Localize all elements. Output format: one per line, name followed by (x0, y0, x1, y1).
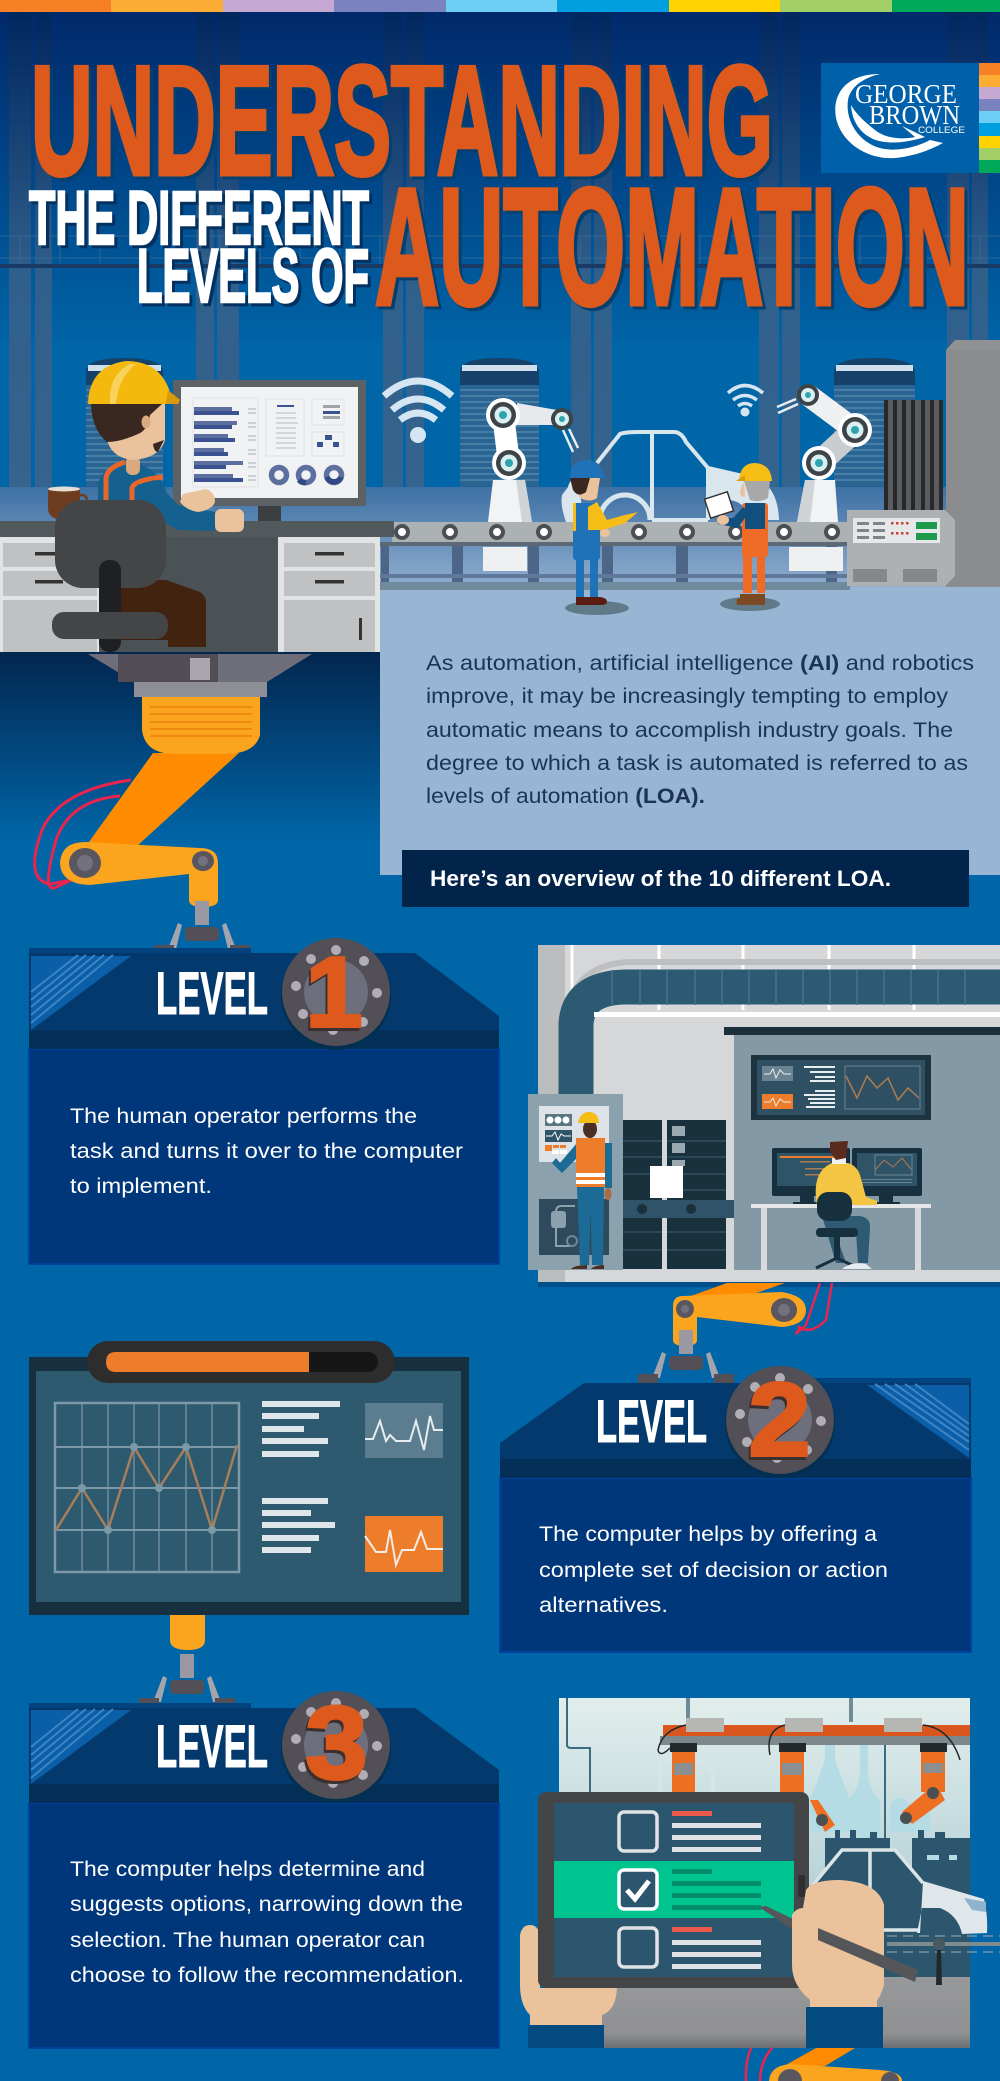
level 3 header: 3 (306, 1686, 367, 1800)
left deep-blue gradient under desk (0, 652, 380, 842)
overhead gantry and robots (658, 1718, 970, 1832)
checklist row 3 (619, 1927, 761, 1969)
level 1 description: task and turns it over to the computer (70, 1140, 463, 1163)
server racks (86, 358, 915, 487)
level 3 description: choose to follow the recommendation. (70, 1964, 464, 1987)
level 2 description: The computer helps by offering a (539, 1523, 877, 1546)
header factory backdrop (0, 12, 1000, 488)
intro text panel (380, 652, 1000, 875)
car body frame (562, 432, 779, 522)
title (29, 34, 969, 340)
right hand with stylus (759, 1880, 918, 2048)
intro text panel: levels of automation (LOA). (426, 785, 705, 808)
robot arm right (777, 384, 872, 522)
robot arm 2 (638, 1283, 832, 1383)
level 1 header (29, 937, 499, 1050)
level 2 header: 2 (749, 1362, 810, 1477)
overview callout bar: Here’s an overview of the 10 different LOA. (430, 866, 891, 891)
title: THE DIFFERENT (29, 176, 369, 261)
operator (88, 361, 244, 532)
robot arm 1 (35, 654, 312, 954)
overview callout bar (402, 850, 969, 907)
level 3 description: The computer helps determine and (70, 1858, 425, 1881)
intro text panel: improve, it may be increasingly tempting to employ (426, 685, 949, 708)
office chair (52, 500, 206, 652)
desk and operator (0, 361, 394, 652)
level 3 header: LEVEL (156, 1713, 268, 1780)
text bars (262, 1401, 340, 1553)
coffee mug (48, 486, 87, 520)
logo: George Brown College (821, 63, 1000, 173)
panel: level 2 (500, 1362, 971, 1652)
technician at panel (552, 1112, 612, 1269)
level 2 description: alternatives. (539, 1594, 668, 1617)
level 1 description: The human operator performs the (70, 1105, 417, 1128)
panel: level 1 (29, 937, 499, 1264)
worker: orange overalls (704, 463, 780, 611)
level 2 description (539, 1523, 888, 1617)
factory scene (0, 340, 1000, 875)
conveyor belt (380, 522, 850, 590)
intro text panel: As automation, artificial intelligence (AI) and robotics (426, 652, 974, 675)
desk (0, 521, 394, 652)
colour stripe top bar (0, 0, 1000, 12)
robot arm left (486, 398, 578, 522)
title: LEVELS OF (137, 234, 369, 319)
checklist row 1 (619, 1811, 761, 1852)
monitor with dashboard (173, 380, 366, 521)
level 1 description (70, 1105, 463, 1198)
worker: blue helmet (565, 460, 638, 615)
icon: wifi large (384, 381, 452, 443)
logo: George Brown College: COLLEGE (918, 125, 965, 135)
robot arm 3 stem (139, 1615, 235, 1707)
desk with monitors and operator (751, 1141, 931, 1270)
level 3 header (29, 1686, 499, 1803)
level 2 header: LEVEL (596, 1388, 707, 1455)
dashboard illustration (29, 1341, 469, 1615)
robot arm 4 (746, 2048, 902, 2081)
intro text panel: degree to which a task is automated is referred to as (426, 752, 968, 775)
intro text panel: automatic means to accomplish industry goals. The (426, 719, 953, 742)
server racks (623, 1120, 734, 1269)
level 3 description (70, 1858, 464, 1987)
floor (380, 587, 1000, 875)
back wall band (0, 487, 1000, 587)
machine cabinet (847, 340, 1000, 587)
level 1 header: LEVEL (156, 960, 268, 1027)
logo: George Brown College: GEORGE (855, 79, 957, 109)
level 2 header (500, 1362, 971, 1478)
level 1 header: 1 (306, 937, 362, 1047)
control cabinet (528, 1094, 623, 1270)
line chart (55, 1403, 239, 1572)
progress bar (87, 1341, 395, 1383)
level 3 description: selection. The human operator can (70, 1929, 425, 1952)
level 1 description: to implement. (70, 1175, 212, 1198)
level 3 description: suggests options, narrowing down the (70, 1893, 463, 1916)
level 2 description: complete set of decision or action (539, 1559, 888, 1582)
pulse tiles (365, 1403, 443, 1572)
illustration: tablet and assembly line (520, 1698, 1000, 2048)
logo: George Brown College: BROWN (869, 100, 960, 130)
wall dashboard screen (751, 1055, 931, 1120)
left hand (520, 1925, 617, 2048)
factory silhouette (559, 1698, 970, 2048)
checklist row 2 selected (619, 1869, 761, 1910)
panel: level 3 (29, 1686, 499, 2048)
icon: wifi small (728, 386, 763, 416)
tablet checklist (538, 1792, 809, 1988)
illustration: control room (528, 945, 1000, 1287)
car body (813, 1850, 1000, 1985)
